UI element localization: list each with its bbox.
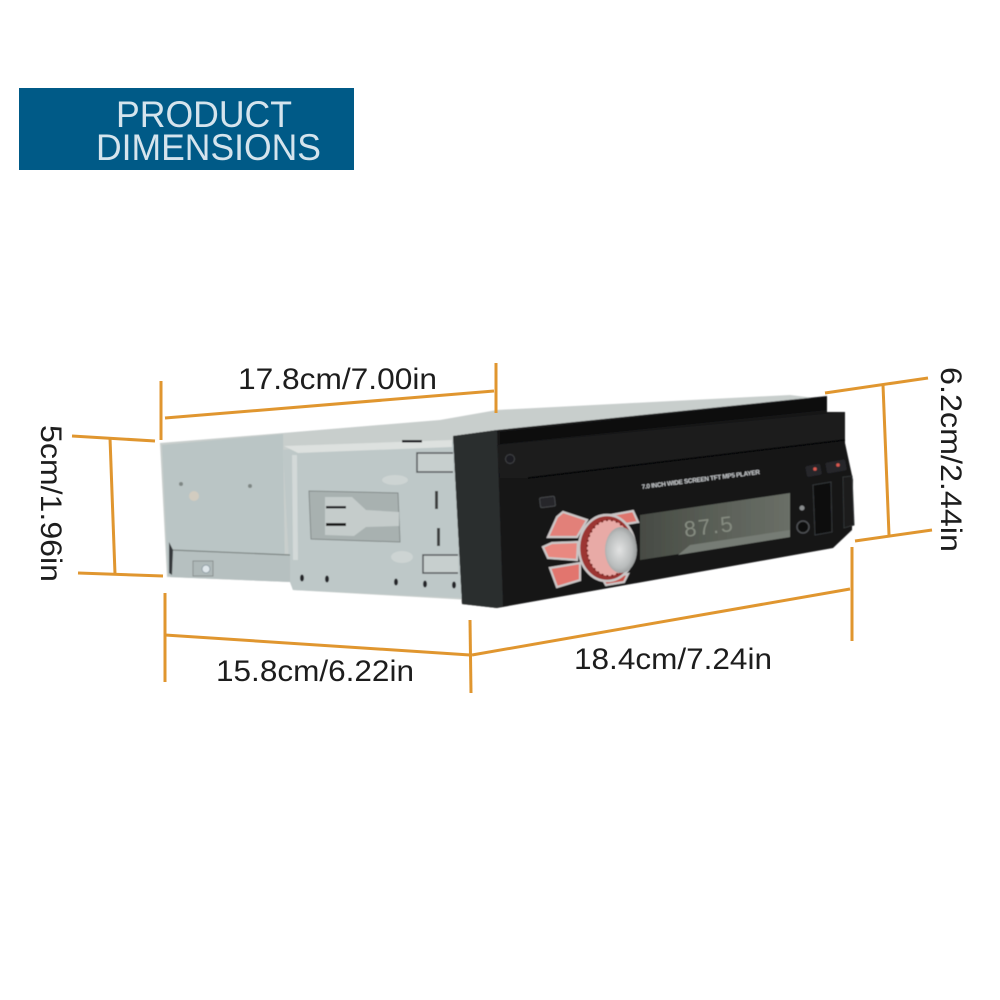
title banner — [19, 88, 354, 170]
black faceplate — [453, 396, 853, 608]
dimension: bottom depth — [165, 593, 471, 693]
dimension: left height — [72, 436, 163, 576]
product photo: car stereo — [160, 395, 854, 608]
label: 17.8cm: 17.8cm/7.00in — [238, 363, 437, 396]
chassis cut-out bracket — [309, 491, 400, 542]
title text: PRODUCT — [116, 94, 292, 135]
metal chassis — [160, 395, 815, 600]
title text: DIMENSIONS — [96, 127, 321, 168]
label: 6.2cm: 6.2cm/2.44in — [934, 367, 967, 552]
label: 18.4cm: 18.4cm/7.24in — [574, 643, 772, 676]
small buttons — [539, 459, 854, 535]
volume knob — [579, 515, 637, 581]
dimension: right height — [825, 378, 932, 541]
dimension: top length — [161, 363, 496, 440]
red control buttons — [543, 511, 638, 587]
label: 5cm: 5cm/1.96in — [34, 425, 67, 582]
dimension lines — [72, 363, 932, 693]
title text — [96, 94, 321, 168]
dimension labels — [34, 363, 967, 688]
dimension: bottom width — [472, 547, 852, 655]
LCD display — [640, 493, 790, 560]
model label: 7.0 INCH WIDE SCREEN TFT MP5 PLAYER — [641, 469, 761, 491]
LCD display: 87.5 — [683, 511, 736, 542]
label: 15.8cm: 15.8cm/6.22in — [216, 655, 414, 688]
